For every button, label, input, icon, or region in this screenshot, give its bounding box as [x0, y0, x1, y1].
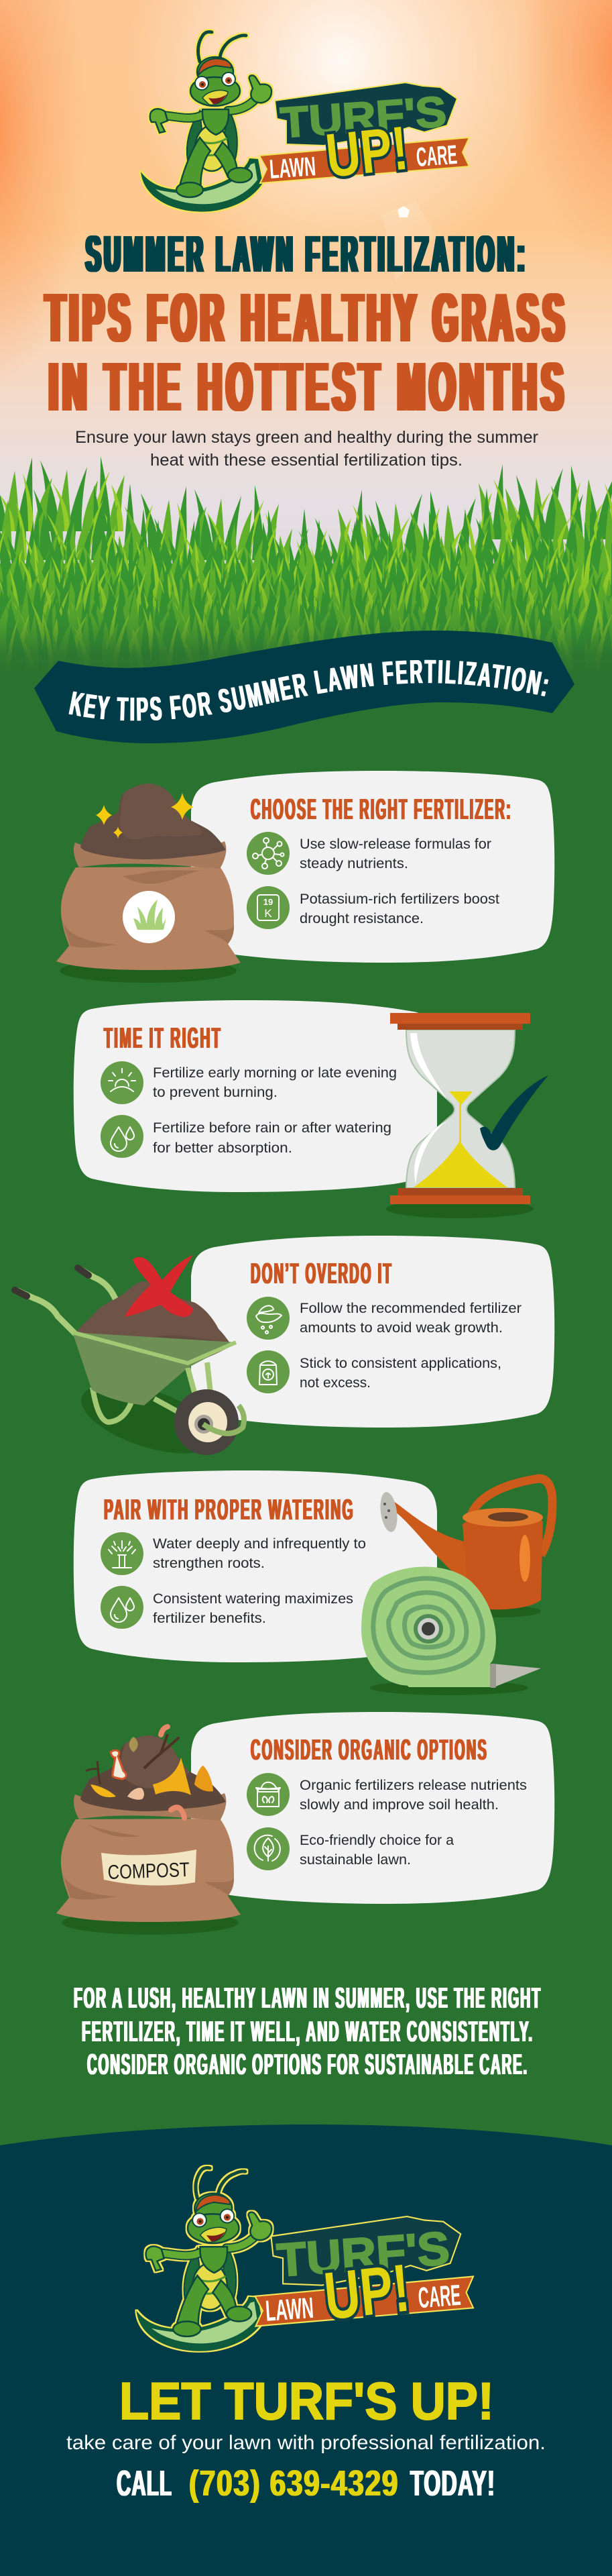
icon: sparkles [96, 793, 194, 839]
phone line: TODAY! [410, 2463, 495, 2504]
tip text [153, 1591, 353, 1626]
call to action heading: LET TURF'S UP! [119, 2371, 494, 2430]
tip text: Organic fertilizers release nutrients [300, 1777, 527, 1793]
tip text: Use slow-release formulas for [300, 836, 491, 852]
tip text: Fertilize before rain or after watering [153, 1120, 391, 1136]
card [191, 1712, 554, 1904]
card [191, 771, 554, 963]
icon: hand spreading fertilizer [247, 1297, 290, 1340]
intro text: heat with these essential fertilization tips. [150, 451, 463, 470]
intro text: Ensure your lawn stays green and healthy during the summer [75, 428, 538, 447]
icon: water drops [101, 1586, 143, 1629]
tip text: Follow the recommended fertilizer [300, 1300, 522, 1316]
tip text: drought resistance. [300, 910, 424, 926]
phone line: CALL [117, 2463, 172, 2504]
icon: potassium element: K [264, 907, 272, 920]
ribbon text: KEY TIPS FOR SUMMER LAWN FERTILIZATION: [68, 660, 548, 720]
logo mascot [136, 2167, 271, 2351]
wheel [174, 1389, 239, 1455]
top logo [141, 32, 469, 212]
panel 5: consider organic options [56, 1712, 554, 1935]
intro text [75, 428, 538, 470]
footer logo [136, 2167, 473, 2351]
logo wordmark: LAWN [265, 2292, 314, 2328]
illustration: watering can [378, 1479, 552, 1617]
ribbon: key tips heading [34, 631, 574, 743]
icon: sunrise [101, 1061, 143, 1104]
sky background [0, 0, 612, 577]
tip text: for better absorption. [153, 1140, 292, 1156]
logo wordmark: UP! [321, 2249, 413, 2334]
logo wordmark [259, 83, 469, 191]
icon: checkmark [480, 1075, 548, 1150]
icon: fertilizer bag [247, 1350, 290, 1393]
tip text [300, 836, 491, 871]
panel 4: pair with proper watering [74, 1470, 552, 1695]
icon: sprinkler [101, 1532, 143, 1575]
compost label [101, 1849, 196, 1886]
tip text: fertilizer benefits. [153, 1610, 266, 1626]
tip text: steady nutrients. [300, 855, 408, 871]
card [191, 1236, 554, 1428]
tip text [300, 1777, 527, 1813]
tip text [300, 891, 499, 926]
illustration: fertilizer sack [56, 784, 241, 983]
summary text [74, 1982, 542, 2081]
panel 3: don't overdo it: DON’T OVERDO IT [251, 1257, 393, 1290]
tip text [300, 1355, 501, 1391]
logo mascot [141, 32, 271, 212]
tip text: Potassium-rich fertilizers boost [300, 891, 499, 907]
watering can rose [378, 1491, 400, 1533]
icon: potassium element [247, 886, 290, 929]
panel 2: time it right: TIME IT RIGHT [104, 1022, 222, 1055]
panel 2: time it right [74, 1000, 548, 1218]
tip text: Fertilize early morning or late evening [153, 1065, 397, 1081]
tip text: Stick to consistent applications, [300, 1355, 501, 1371]
logo wordmark: TURF'S [276, 2222, 451, 2287]
card [74, 1470, 437, 1662]
icon: water drops [101, 1115, 143, 1158]
panel 3: don't overdo it [15, 1236, 554, 1467]
icon: potassium element: 19 [263, 897, 273, 907]
tip text [153, 1536, 366, 1571]
logo wordmark: LAWN [269, 152, 316, 184]
logo wordmark: CARE [416, 140, 458, 172]
illustration: garden hose [361, 1567, 541, 1695]
icon: molecule [247, 832, 290, 875]
tip text: amounts to avoid weak growth. [300, 1320, 503, 1336]
tip text: Water deeply and infrequently to [153, 1536, 366, 1552]
illustration: hourglass with check [386, 1013, 548, 1218]
icon: organic bag [247, 1773, 290, 1816]
tip text: not excess. [300, 1375, 371, 1391]
tip text: sustainable lawn. [300, 1851, 411, 1868]
logo wordmark: UP! [322, 114, 411, 191]
illustration: compost sack [56, 1727, 241, 1935]
logo wordmark: TURF'S [279, 87, 448, 147]
tip text [300, 1832, 454, 1868]
tip text: strengthen roots. [153, 1555, 265, 1571]
tip text: to prevent burning. [153, 1084, 278, 1100]
illustration: wheelbarrow with red X [15, 1255, 244, 1467]
badge: grass label [123, 891, 175, 943]
footer panel [0, 2125, 612, 2576]
icon: red X [125, 1255, 193, 1317]
green lawn background [0, 671, 612, 2160]
compost scraps [86, 1727, 213, 1818]
tip text [153, 1065, 397, 1100]
panel 1: choose the right fertilizer [56, 771, 554, 983]
icon: eco leaf [247, 1827, 290, 1870]
call to action text: take care of your lawn with professional fertilization. [66, 2432, 546, 2454]
tip text [153, 1120, 391, 1156]
tip text: Eco-friendly choice for a [300, 1832, 454, 1848]
phone line: (703) 639-4329 [189, 2463, 399, 2504]
tip text: slowly and improve soil health. [300, 1796, 499, 1813]
grass band [0, 451, 612, 674]
title [46, 225, 568, 425]
compost label: COMPOST [107, 1859, 190, 1884]
logo wordmark [255, 2216, 473, 2334]
tip text: Consistent watering maximizes [153, 1591, 353, 1607]
card [74, 1000, 437, 1192]
logo wordmark: CARE [417, 2279, 462, 2315]
tip text [300, 1300, 522, 1336]
